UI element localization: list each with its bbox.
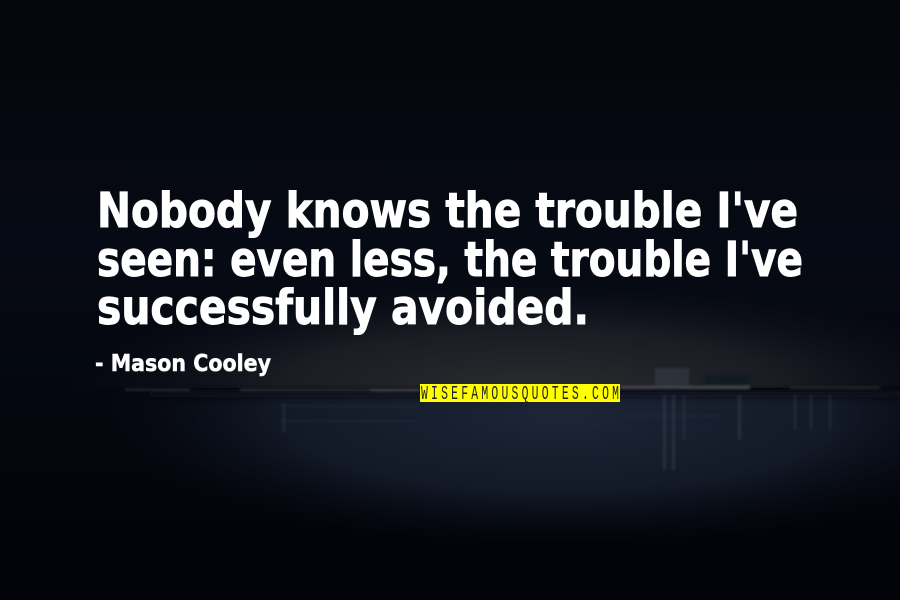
quote text [97,183,803,336]
quote text: successfully avoided. [97,280,589,336]
attribution: - Mason Cooley [95,351,271,377]
watermark badge: WISEFAMOUSQUOTES.COM [421,383,619,405]
